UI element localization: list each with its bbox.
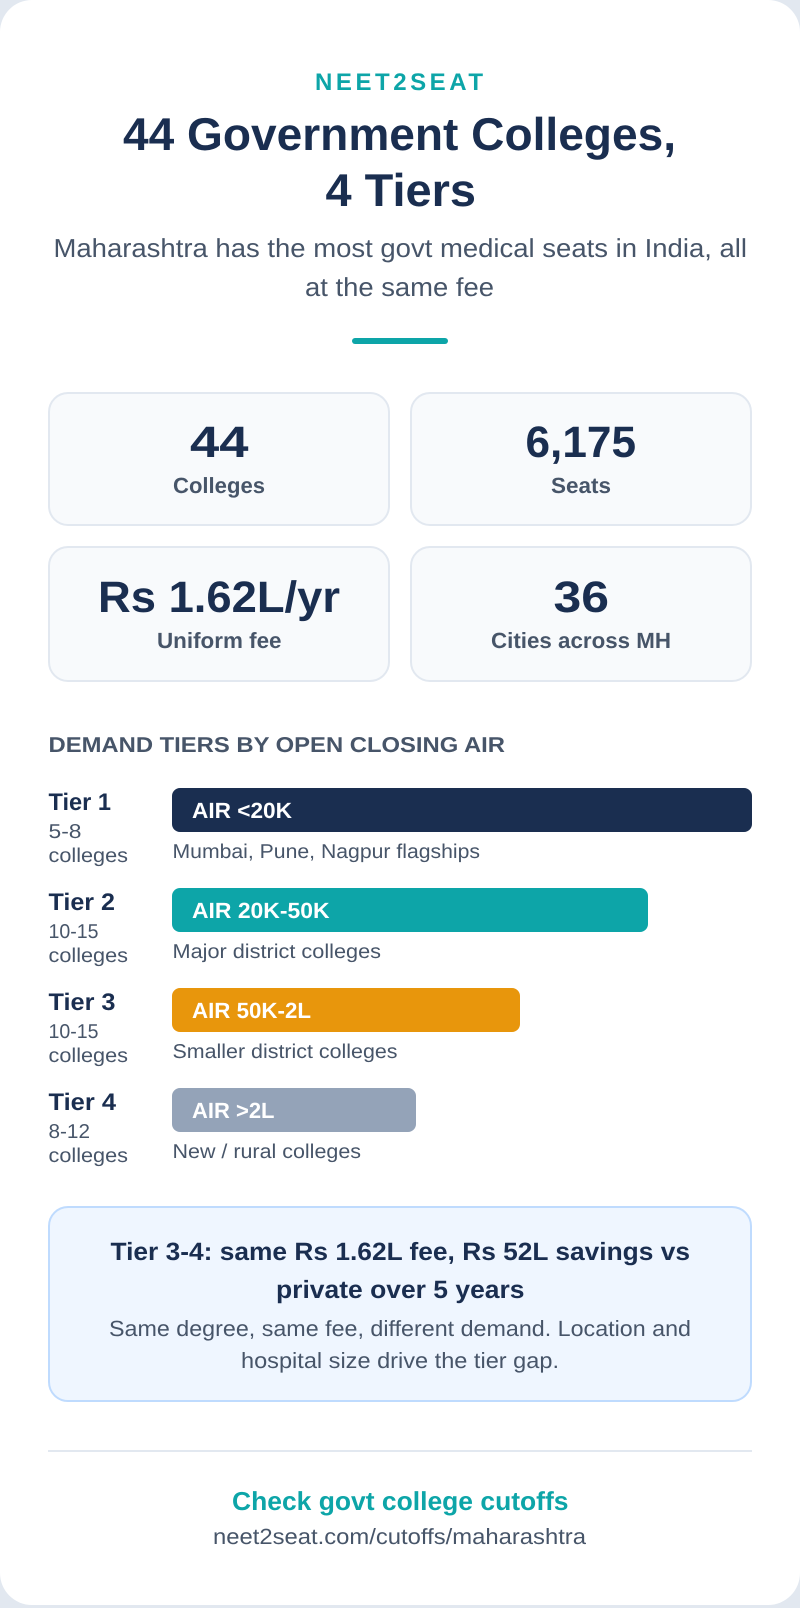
tier 1 row	[48, 788, 752, 867]
stat: seats: 6,175	[526, 418, 636, 467]
tier 4 row: colleges	[48, 1145, 128, 1167]
section heading: DEMAND TIERS BY OPEN CLOSING AIR	[48, 733, 506, 757]
tier 2 row: AIR 20K-50K	[192, 898, 330, 923]
tier 3 row: AIR 50K-2L	[192, 998, 311, 1023]
tier 1 row: colleges	[48, 845, 128, 867]
header	[54, 69, 747, 302]
tier 1 row: 5-8	[48, 821, 82, 843]
stat: seats	[411, 393, 751, 525]
tier chart	[48, 788, 752, 1167]
stat: colleges: 44	[190, 418, 249, 467]
tier 1 row: Mumbai, Pune, Nagpur flagships	[172, 841, 480, 863]
title: 4 Tiers	[326, 164, 476, 216]
tier 3 row: colleges	[48, 1045, 128, 1067]
call to action: neet2seat.com/cutoffs/maharashtra	[213, 1524, 587, 1549]
stat cards	[49, 393, 751, 681]
tier 3 row	[48, 988, 520, 1067]
callout: private over 5 years	[276, 1276, 524, 1304]
tier 4 row	[48, 1088, 416, 1167]
callout: Same degree, same fee, different demand. Location and	[109, 1316, 691, 1341]
tier 4 row: New / rural colleges	[172, 1141, 361, 1163]
stat: uniform fee: Uniform fee	[157, 628, 282, 653]
subtitle	[54, 233, 747, 302]
tier 4 row: AIR >2L	[192, 1098, 274, 1123]
stat: uniform fee	[49, 547, 389, 681]
title: 44 Government Colleges,	[123, 108, 676, 160]
stat: colleges	[49, 393, 389, 525]
tier 4 row: 8-12	[48, 1121, 90, 1143]
callout: hospital size drive the tier gap.	[241, 1348, 559, 1373]
tier 3 row: Smaller district colleges	[172, 1041, 398, 1063]
tier 2 row	[48, 888, 648, 967]
stat: uniform fee: Rs 1.62L/yr	[98, 573, 340, 622]
subtitle: Maharashtra has the most govt medical seats in India, all	[54, 233, 747, 263]
callout	[49, 1207, 751, 1401]
title	[123, 108, 676, 216]
tier 2 row: colleges	[48, 945, 128, 967]
tier 2 row: 10-15	[48, 921, 98, 943]
stat: colleges: Colleges	[173, 473, 265, 498]
stat: cities: 36	[554, 573, 609, 622]
callout: Tier 3-4: same Rs 1.62L fee, Rs 52L savings vs	[110, 1238, 690, 1266]
tier 1 row: AIR <20K	[192, 798, 292, 823]
tier 3 row: Tier 3	[48, 989, 116, 1016]
stat: seats: Seats	[551, 473, 611, 498]
call to action: Check govt college cutoffs	[232, 1486, 568, 1516]
call to action	[213, 1486, 587, 1549]
brand label: NEET2SEAT	[315, 69, 483, 96]
tier 1 row: Tier 1	[48, 789, 111, 816]
tier 2 row: Major district colleges	[172, 941, 381, 963]
tier 3 row: 10-15	[48, 1021, 98, 1043]
tier 4 row: Tier 4	[48, 1089, 117, 1116]
stat: cities	[411, 547, 751, 681]
subtitle: at the same fee	[305, 272, 494, 302]
tier 2 row: Tier 2	[48, 889, 115, 916]
stat: cities: Cities across MH	[491, 628, 671, 653]
